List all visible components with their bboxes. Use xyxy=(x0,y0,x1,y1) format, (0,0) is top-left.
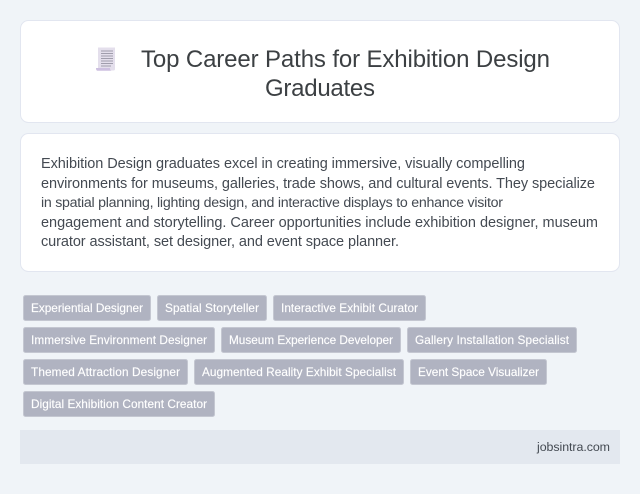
footer text: jobsintra.com: jobsintra.com xyxy=(536,440,610,454)
tag: Experiential Designer xyxy=(24,296,150,320)
tag: Gallery Installation Specialist xyxy=(408,328,576,352)
tag: Immersive Environment Designer: Immersive Environment Designer xyxy=(31,333,207,347)
tag: Augmented Reality Exhibit Specialist: Augmented Reality Exhibit Specialist xyxy=(202,365,397,379)
tag: Augmented Reality Exhibit Specialist xyxy=(194,360,404,384)
text block: introduction paragraph: Exhibition Design graduates excel in creating immersive, visually compelling xyxy=(41,156,525,172)
tag: Spatial Storyteller: Spatial Storyteller xyxy=(165,301,259,315)
tag: Event Space Visualizer: Event Space Visualizer xyxy=(418,365,539,379)
title xyxy=(141,46,550,102)
tag: Spatial Storyteller xyxy=(158,296,266,320)
text block: introduction paragraph: engagement and storytelling. Career opportunities include exhibition designer, museum xyxy=(41,215,598,231)
tag: Museum Experience Developer: Museum Experience Developer xyxy=(229,333,393,347)
tag: Themed Attraction Designer xyxy=(24,360,188,384)
tag list: career paths xyxy=(24,296,576,416)
tag: Experiential Designer: Experiential Designer xyxy=(31,301,143,315)
text block: introduction paragraph: curator assistant, set designer, and event space planner. xyxy=(41,234,399,250)
tag: Gallery Installation Specialist: Gallery Installation Specialist xyxy=(415,333,570,347)
tag: Immersive Environment Designer xyxy=(24,328,214,352)
tag: Interactive Exhibit Curator: Interactive Exhibit Curator xyxy=(281,301,418,315)
panel: footer xyxy=(20,430,620,464)
tag: Themed Attraction Designer: Themed Attraction Designer xyxy=(31,365,180,379)
panel: title header xyxy=(20,20,620,122)
text block: introduction paragraph: in spatial planning, lighting design, and interactive displays to enhance visitor xyxy=(41,195,503,211)
title: Top Career Paths for Exhibition Design xyxy=(141,46,550,73)
title: Graduates xyxy=(265,75,375,102)
tag: Digital Exhibition Content Creator: Digital Exhibition Content Creator xyxy=(31,397,207,411)
tag: Museum Experience Developer xyxy=(222,328,400,352)
panel: introduction xyxy=(20,134,620,272)
text block: introduction paragraph xyxy=(41,156,598,250)
tag: Interactive Exhibit Curator xyxy=(274,296,426,320)
tag: Digital Exhibition Content Creator xyxy=(24,392,214,416)
tag: Event Space Visualizer xyxy=(410,360,546,384)
text block: introduction paragraph: environments for museums, galleries, trade shows, and cultural events. They specialize xyxy=(41,176,595,192)
icon: document scroll xyxy=(96,48,115,71)
